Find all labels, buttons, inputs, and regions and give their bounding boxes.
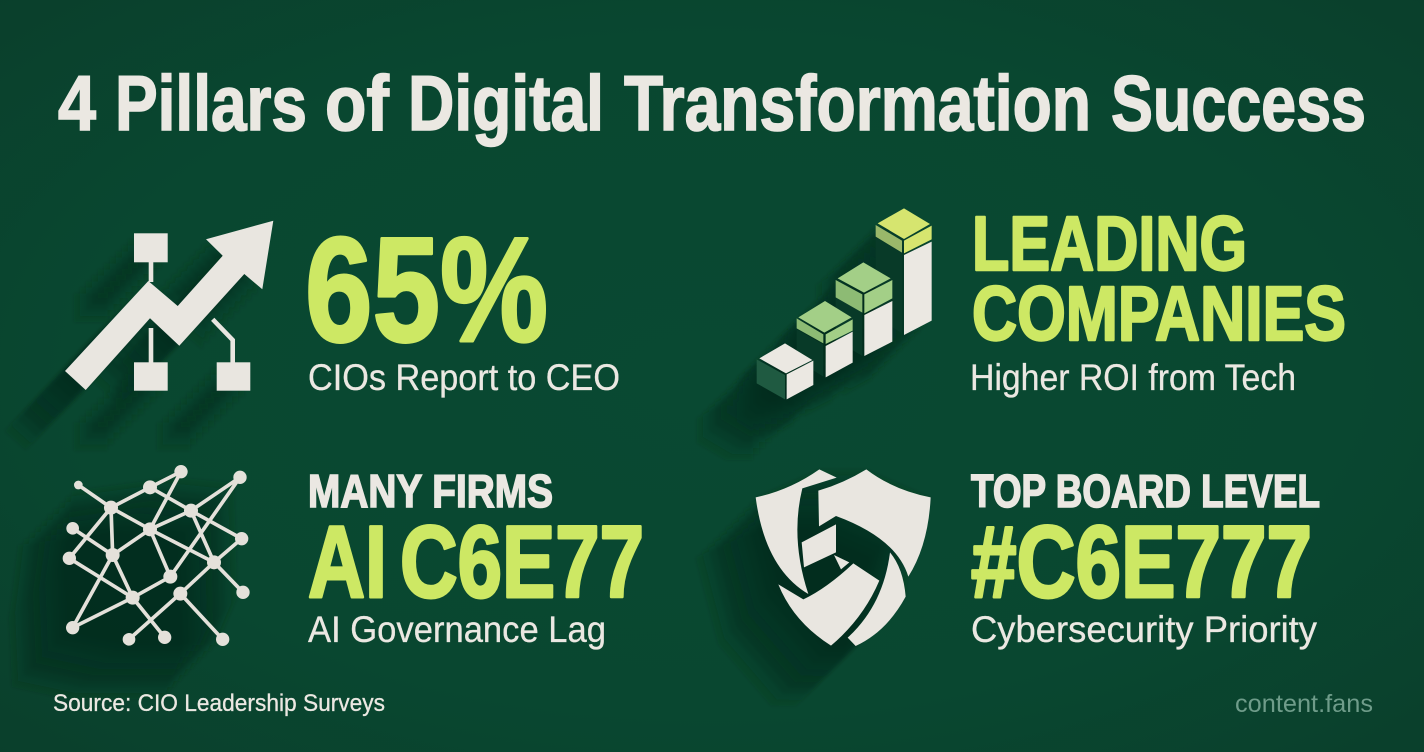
heading: LEADING COMPANIES: LEADING: [972, 201, 1247, 287]
title: of: [325, 59, 390, 147]
label: CIOs Report to CEO: CIOs Report to CEO: [308, 357, 620, 398]
icon: network graph: [9, 465, 250, 699]
stat: AI C6E77: AI: [308, 505, 387, 619]
stat: 65%: 65%: [305, 206, 548, 373]
icon: isometric bars: [697, 208, 932, 460]
heading: TOP BOARD LEVEL: TOP BOARD LEVEL: [971, 465, 1320, 517]
icon: rising arrow with flowchart boxes: [5, 221, 273, 451]
brand: content.fans: content.fans: [1235, 690, 1373, 718]
heading: LEADING COMPANIES: COMPANIES: [972, 271, 1346, 357]
label: AI Governance Lag: AI Governance Lag: [308, 609, 606, 650]
label: Higher ROI from Tech: Higher ROI from Tech: [970, 357, 1296, 398]
title: 4: [58, 59, 96, 147]
heading: LEADING COMPANIES: [972, 201, 1346, 357]
panel: AI governance: [9, 465, 644, 699]
source note: Source: CIO Leadership Surveys: [53, 690, 385, 717]
title: Success: [1111, 59, 1366, 147]
title: Pillars: [115, 59, 307, 147]
title: Digital: [408, 59, 604, 147]
panel: cybersecurity: [696, 465, 1320, 706]
title: [58, 59, 1366, 147]
stat: AI C6E77: [308, 505, 644, 619]
label: Cybersecurity Priority: Cybersecurity Priority: [971, 609, 1317, 650]
heading: MANY FIRMS: MANY FIRMS: [308, 465, 553, 517]
icon: fractured shield: [696, 469, 931, 706]
title: Transformation: [624, 59, 1091, 147]
panel: leading companies: [697, 201, 1346, 460]
panel: CIOs report to CEO: [5, 206, 620, 451]
stat: AI C6E77: C6E77: [400, 505, 644, 619]
stat: #C6E777: #C6E777: [971, 505, 1312, 619]
